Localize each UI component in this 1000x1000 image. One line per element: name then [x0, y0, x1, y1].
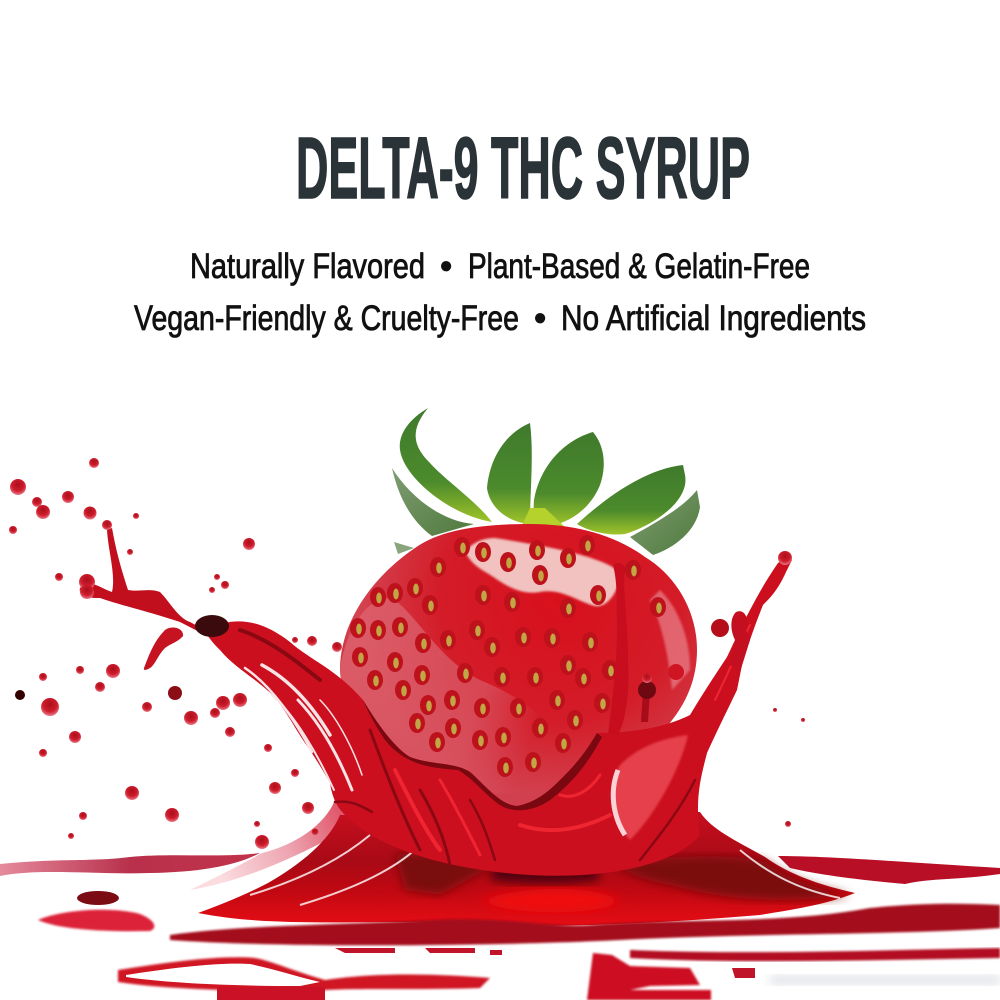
- left puddle: [38, 910, 154, 931]
- feature line 1: Plant-Based & Gelatin-Free: [468, 247, 810, 286]
- crown dark streaks: [240, 630, 695, 865]
- hanging drop arm: [144, 628, 183, 670]
- dark left shadow: [395, 853, 495, 895]
- centre vertical spout: [608, 563, 629, 735]
- crown white streaks left: [245, 665, 362, 790]
- grey water streaks: [770, 975, 1000, 985]
- crown bright streaks: [395, 625, 750, 855]
- feature line 2: •: [534, 299, 546, 338]
- feature line 2: No Artificial Ingredients: [561, 299, 866, 338]
- droplets: [9, 458, 805, 849]
- second band: [630, 948, 1000, 961]
- liquid pool: [0, 800, 1000, 1000]
- right back ripple: [778, 856, 1000, 884]
- dark right side of pool: [610, 856, 850, 900]
- feature line 2: Vegan-Friendly & Cruelty-Free: [134, 299, 519, 338]
- base of splash: [198, 812, 855, 926]
- reflection chunk centre: [587, 953, 711, 1000]
- pink left flare: [190, 800, 349, 890]
- feature line 1: [190, 247, 810, 286]
- crown light patch right: [612, 735, 688, 840]
- strawberry: [340, 408, 700, 815]
- dark shadow under berry: [490, 853, 600, 884]
- arm knot: [195, 615, 229, 637]
- feature line 1: •: [440, 247, 452, 286]
- left back ripple: [0, 853, 260, 876]
- strawberry leaves: [392, 408, 700, 555]
- feature line 2: [134, 299, 866, 338]
- left arm: [80, 528, 215, 640]
- crown dark lip: [363, 700, 602, 810]
- small dark blob: [77, 891, 119, 905]
- reflection chunk left: [217, 987, 325, 1000]
- splash crown: [80, 528, 792, 876]
- right spout tendrils: [730, 611, 750, 672]
- reflection highlight: [126, 964, 320, 986]
- strawberry body: [340, 524, 697, 815]
- crown body: [205, 558, 792, 876]
- reflection small drops: [335, 948, 755, 978]
- white ripple streaks: [250, 835, 840, 905]
- bright core: [480, 889, 620, 912]
- crown white highlight right: [613, 770, 625, 835]
- reflection outline: [118, 957, 490, 991]
- deep band: [170, 904, 1000, 945]
- strawberry seeds: [350, 535, 666, 777]
- small secondary spout: [641, 690, 650, 722]
- feature line 1: Naturally Flavored: [190, 247, 425, 286]
